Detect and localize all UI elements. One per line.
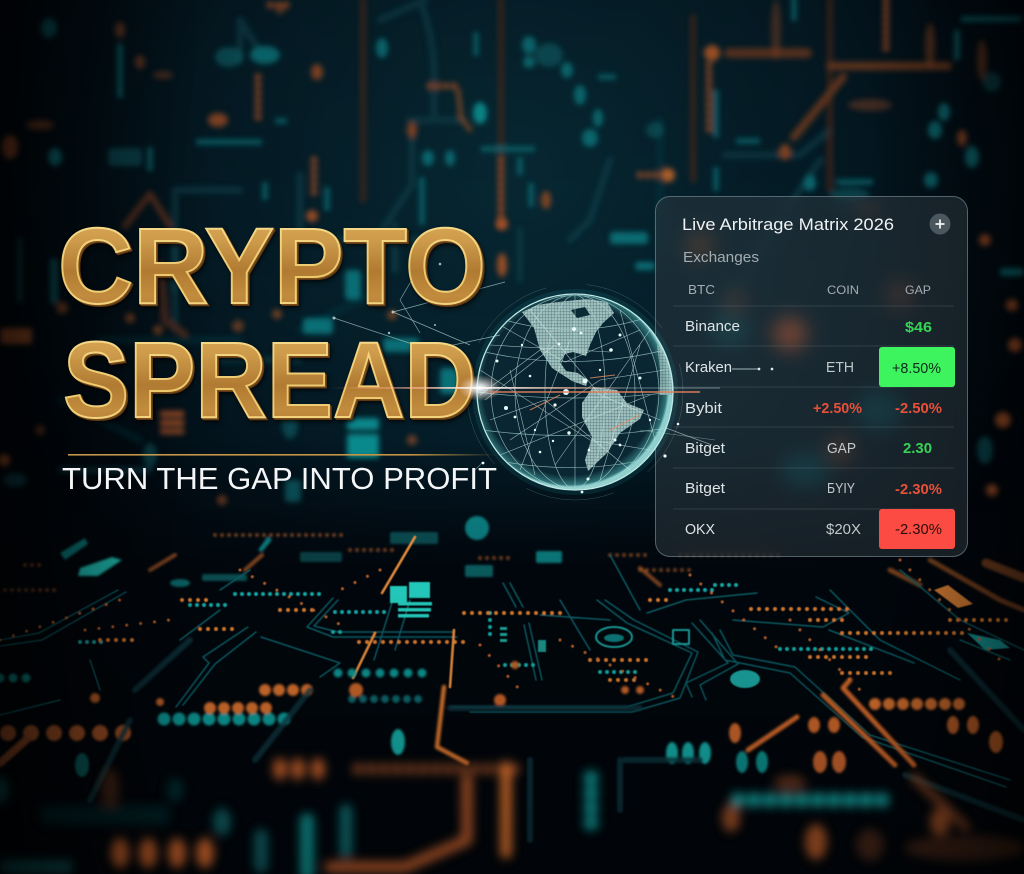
panel: live arbitrage matrix bbox=[655, 196, 968, 557]
row: OKX bbox=[685, 509, 955, 549]
row: Bybit: -2.50% bbox=[895, 401, 942, 417]
table column headers: GAP bbox=[905, 283, 931, 297]
row: OKX: $20X bbox=[826, 522, 861, 538]
subheading: exchanges: Exchanges bbox=[683, 250, 759, 266]
title bbox=[58, 205, 486, 440]
row: Bybit: +2.50% bbox=[813, 401, 862, 417]
panel heading: Live Arbitrage Matrix 2026 bbox=[682, 215, 894, 234]
connector line and nodes over panel bbox=[666, 368, 773, 445]
row: Kraken: +8.50% bbox=[892, 361, 941, 377]
row: Bitget bbox=[685, 481, 942, 498]
table column headers: BTC bbox=[688, 282, 715, 297]
mid-band blurred circuit layer bbox=[0, 210, 1024, 505]
icon: plus button bbox=[930, 214, 950, 234]
row: Bitget: Bitget bbox=[685, 481, 725, 497]
foreground out-of-focus circuit bbox=[0, 640, 1024, 840]
overlay: title, globe and flare bbox=[61, 226, 774, 500]
row: Binance: $46 bbox=[905, 320, 932, 336]
title: CRYPTO bbox=[58, 205, 486, 326]
network lines behind title bbox=[332, 232, 505, 350]
row: OKX: -2.30% bbox=[895, 522, 942, 538]
row: OKX: OKX bbox=[685, 522, 715, 538]
row: Bybit bbox=[685, 401, 942, 417]
row: Bybit: Bybit bbox=[685, 401, 722, 417]
row: Kraken bbox=[685, 347, 955, 387]
lens flare bbox=[330, 375, 720, 401]
continent: south america bbox=[582, 387, 644, 471]
upper blurred circuit layer bbox=[2, 0, 1020, 440]
table column headers bbox=[688, 282, 931, 297]
divider rule bbox=[68, 454, 498, 456]
subtitle: TURN THE GAP INTO PROFIT bbox=[62, 461, 497, 496]
row: Bitget gap: Bitget bbox=[685, 441, 725, 457]
row: Bitget gap: 2.30 bbox=[903, 441, 932, 457]
title: SPREAD bbox=[63, 319, 476, 440]
row: Binance: Binance bbox=[685, 319, 740, 335]
teal pads bbox=[120, 0, 1020, 225]
row: Bitget gap: GAP bbox=[827, 441, 856, 457]
row: Bitget: БYIY bbox=[827, 481, 855, 497]
row: Bitget: -2.30% bbox=[895, 482, 942, 498]
near-horizon soft pads bbox=[5, 516, 1024, 610]
table column headers: COIN bbox=[827, 283, 859, 297]
row: Kraken: ETH bbox=[826, 360, 854, 376]
row: Binance bbox=[685, 319, 932, 336]
continent: north america bbox=[522, 299, 614, 386]
globe bbox=[467, 284, 715, 500]
row: Bitget gap bbox=[685, 441, 932, 457]
orange pads bbox=[258, 0, 886, 227]
crisp circuit traces bbox=[0, 537, 1024, 787]
row: Kraken: Kraken bbox=[685, 360, 732, 376]
